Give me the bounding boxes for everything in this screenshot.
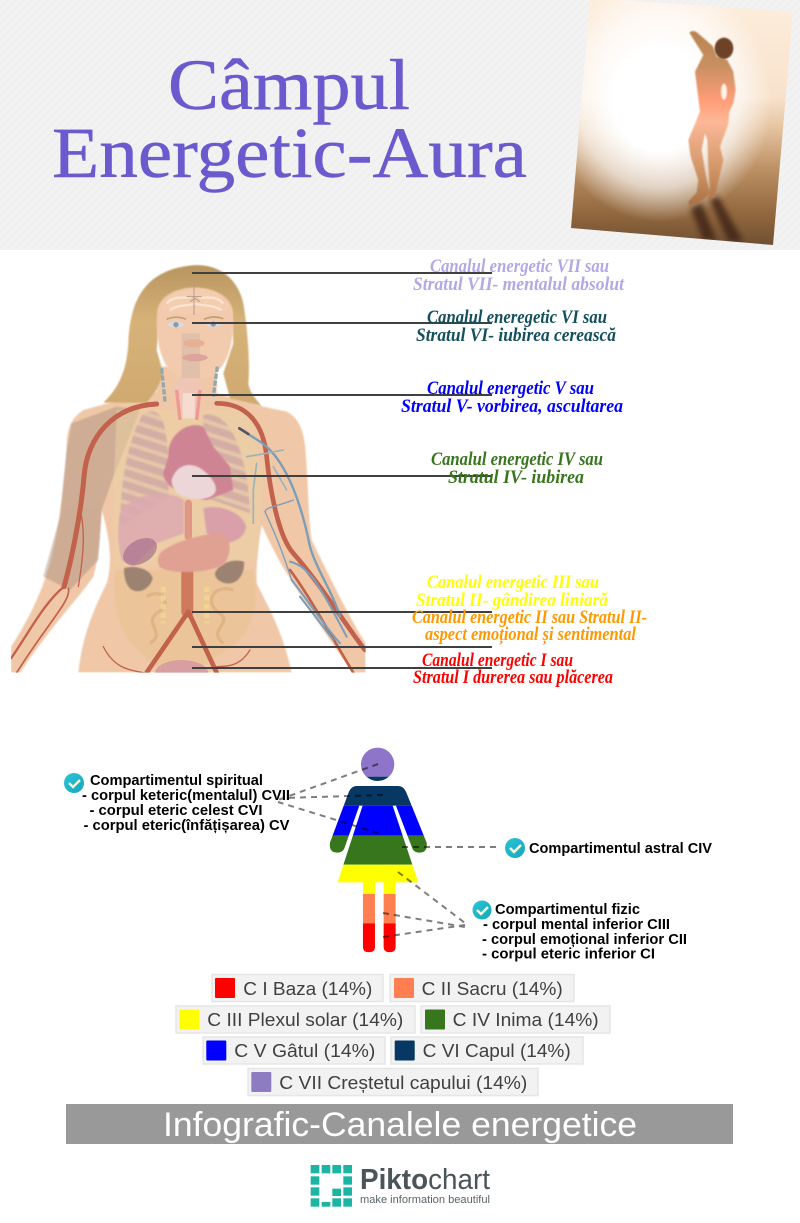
- callout: astral: Compartimentul astral CIV: [529, 841, 712, 857]
- veins: [239, 428, 347, 643]
- banner: [66, 1104, 733, 1144]
- label: canal III: Canalul energetic III sau: [427, 572, 599, 593]
- icon: check badge: [64, 773, 84, 793]
- label: canal I: Canalul energetic I sau: [422, 650, 573, 671]
- label: canal VI: [416, 307, 616, 346]
- stomach: [203, 507, 246, 543]
- kidney left: [123, 538, 157, 566]
- label: canal IV: Stratul IV- iubirea: [448, 467, 584, 488]
- legend item: C V: [203, 1037, 385, 1064]
- woman pictogram with colored bands: [330, 748, 427, 952]
- label: canal VI: Canalul eneregetic VI sau: [427, 307, 607, 328]
- Piktochart logo: make information beautiful: [360, 1194, 490, 1206]
- legend item: C VII: [248, 1068, 538, 1096]
- legend item: C II: C II Sacru (14%): [422, 979, 563, 999]
- legend item: C VI: C VI Capul (14%): [423, 1041, 571, 1061]
- callout: spiritual: - corpul keteric(mentalul) CVII: [82, 788, 290, 804]
- callout: fizic: - corpul eteric inferior CI: [482, 946, 655, 962]
- label: canal II: aspect emoțional și sentimental: [425, 624, 637, 645]
- label: canal V: Stratul V- vorbirea, ascultarea: [401, 396, 623, 417]
- header background: [0, 0, 800, 250]
- heart: [163, 425, 233, 500]
- callout: spiritual: - corpul eteric(înfățișarea) CV: [84, 818, 290, 834]
- label: canal III: [416, 572, 608, 611]
- label: canal I: [413, 650, 613, 688]
- title: Energetic-Aura: [52, 113, 527, 193]
- label: canal I: Stratul I durerea sau plăcerea: [413, 667, 613, 688]
- anatomical body figure: [11, 265, 366, 687]
- legend item: C V: C V Gâtul (14%): [234, 1041, 375, 1061]
- legend item: C IV: [421, 1006, 610, 1033]
- logo mark: [311, 1165, 352, 1207]
- Piktochart logo: Piktochart: [360, 1164, 490, 1196]
- icon: check badge: [472, 900, 492, 920]
- label: canal VI: Stratul VI- iubirea cerească: [416, 325, 616, 346]
- banner: Infografic-Canalele energetice: [163, 1106, 637, 1144]
- leader lines: [192, 273, 492, 668]
- callout: fizic: - corpul emoțional inferior CII: [482, 932, 687, 948]
- dashed connectors: [278, 764, 496, 937]
- label: canal II: [412, 607, 647, 645]
- nose and mouth strip: [182, 333, 208, 378]
- callout: fizic: [472, 900, 687, 962]
- shoulder muscle: [43, 407, 140, 590]
- lungs: [120, 411, 250, 514]
- Piktochart logo: [311, 1164, 490, 1207]
- callout: spiritual: - corpul eteric celest CVI: [90, 803, 262, 819]
- label: canal VII: [413, 256, 625, 295]
- label: canal IV: [431, 449, 603, 488]
- legend item: C I: [212, 974, 383, 1002]
- callout: spiritual: [64, 773, 290, 834]
- legend item: C IV: C IV Inima (14%): [453, 1010, 599, 1030]
- label: canal II: Canalul energetic II sau Stratul II-: [412, 607, 647, 628]
- legend item: C III: C III Plexul solar (14%): [207, 1010, 403, 1030]
- legend item: C VII: C VII Creștetul capului (14%): [279, 1073, 527, 1093]
- legend: [176, 974, 610, 1096]
- photo: glowing figure: [571, 0, 793, 245]
- label: canal VII: Canalul energetic VII sau: [430, 256, 609, 277]
- callout: fizic: - corpul mental inferior CIII: [483, 917, 670, 933]
- aorta and arteries: [11, 403, 365, 673]
- pancreas: [158, 533, 230, 572]
- legend item: C III: [176, 1006, 415, 1033]
- eyes and eyebrows: [167, 317, 223, 328]
- skin silhouette: [11, 367, 366, 673]
- abdomen intestines: [114, 570, 256, 670]
- diaphragm and liver: [118, 494, 184, 567]
- title: Câmpul: [168, 45, 410, 125]
- trachea and neck vessels: [173, 378, 203, 420]
- brain overlay: [166, 280, 224, 315]
- legend item: C II: [390, 974, 574, 1002]
- kidneys: [124, 561, 244, 591]
- label: canal V: [401, 378, 623, 417]
- legend item: C VI: [391, 1037, 583, 1064]
- label: canal VII: Stratul VII- mentalul absolut: [413, 274, 625, 295]
- icon: check badge: [505, 838, 525, 858]
- title: [52, 45, 527, 193]
- thorax overlay: [114, 410, 140, 474]
- neck lymph: [162, 367, 217, 402]
- label: canal V: Canalul energetic V sau: [427, 378, 594, 399]
- label: canal IV: Canalul energetic IV sau: [431, 449, 603, 470]
- callout: fizic: Compartimentul fizic: [495, 902, 640, 918]
- label: canal III: Stratul II- gândirea liniară: [416, 590, 608, 611]
- bladder: [155, 660, 208, 673]
- callout: spiritual: Compartimentul spiritual: [90, 773, 263, 789]
- face: [157, 287, 233, 379]
- hair: [103, 265, 262, 406]
- legend item: C I: C I Baza (14%): [243, 979, 372, 999]
